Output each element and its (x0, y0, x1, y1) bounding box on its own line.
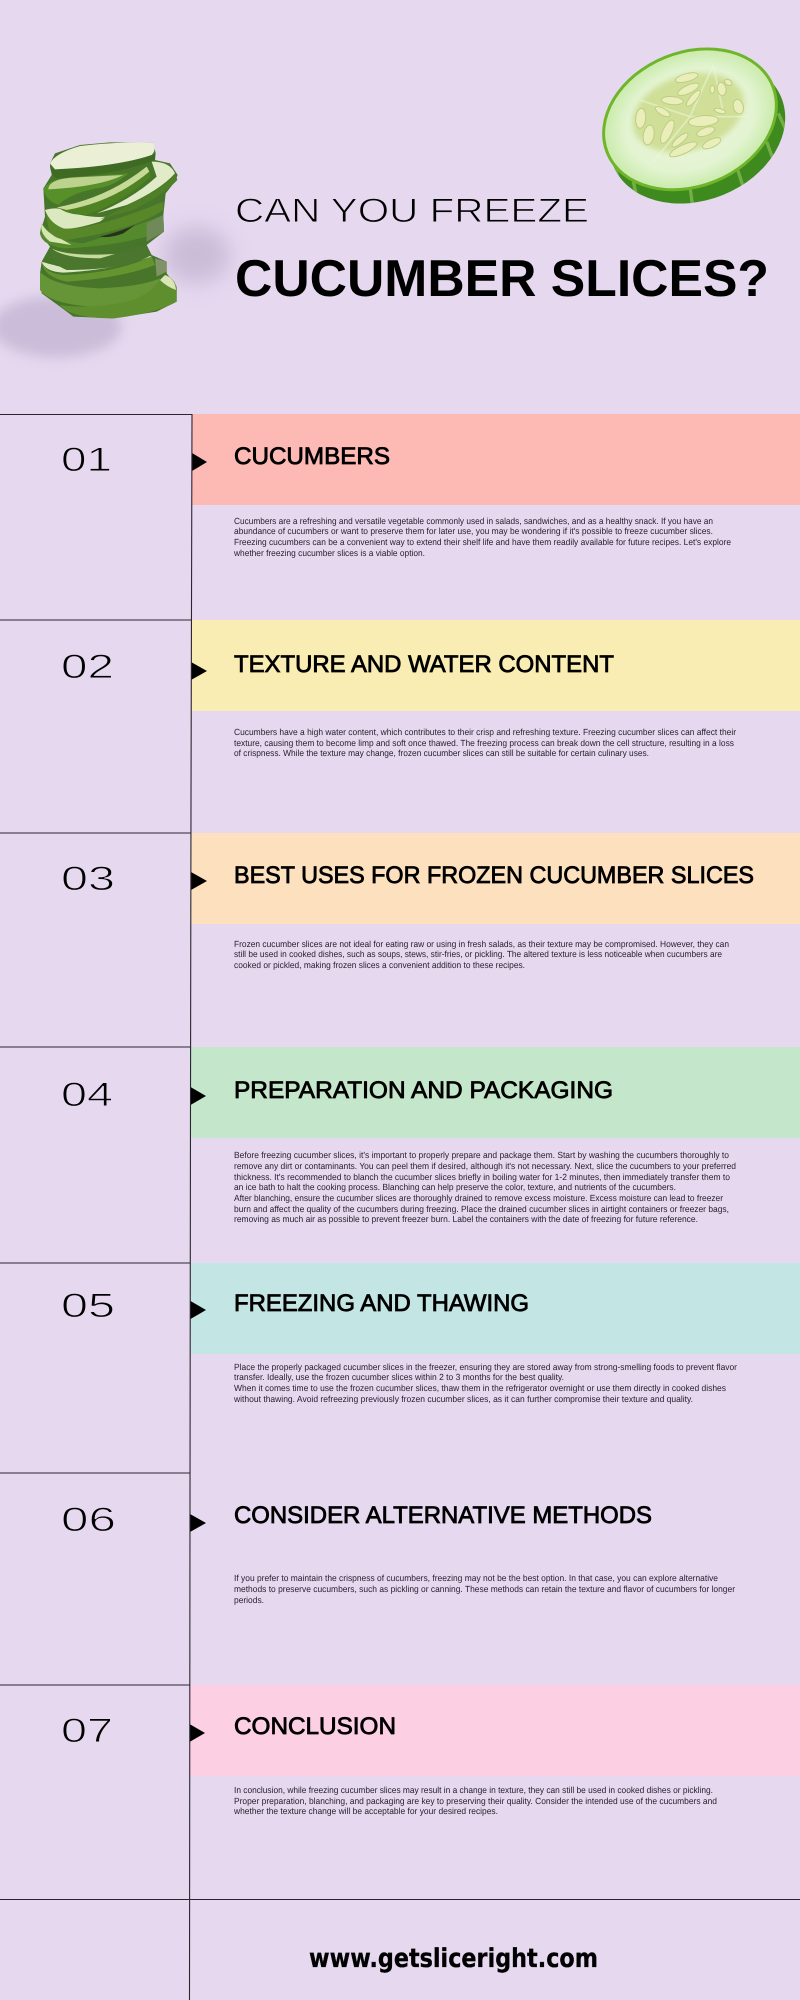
heading: FREEZING AND THAWING (234, 1290, 529, 1317)
header band (190, 1685, 800, 1776)
body text: without thawing. Avoid refreezing previously frozen cucumber slices, as it can further compromise their texture and quality. (233, 1394, 693, 1404)
body text: methods to preserve cucumbers, such as pickling or canning. These methods can retain the texture and flavor of cucumbers for longer (234, 1584, 735, 1594)
body text (234, 1150, 736, 1224)
image: stack of cucumber slices with shadow (0, 142, 230, 357)
panel: section 05 freezing and thawing (61, 1263, 800, 1404)
arrow (190, 1514, 206, 1532)
body text: After blanching, ensure the cucumber slices are thoroughly drained to remove excess moisture. Excess moisture can lead to freezer (234, 1193, 723, 1203)
body text: whether freezing cucumber slices is a viable option. (233, 548, 425, 558)
body text: Before freezing cucumber slices, it's important to properly prepare and package them. Start by washing the cucumbers thoroughly to (234, 1150, 729, 1160)
body text: an ice bath to halt the cooking process. Blanching can help preserve the color, texture, and nutrients of the cucumbers. (234, 1182, 676, 1192)
header band (192, 414, 800, 505)
image: single cucumber slice (602, 48, 786, 204)
footer website address: www.getsliceright.com (309, 1944, 598, 1974)
header band (191, 1047, 800, 1138)
number: 07 (61, 1712, 113, 1750)
panel: section 07 conclusion (61, 1685, 800, 1816)
panel: section 04 preparation and packaging (61, 1047, 800, 1224)
header band (191, 1263, 800, 1354)
body text: Freezing cucumbers can be a convenient way to extend their shelf life and have them readily available for future recipes. Let's explore (234, 537, 731, 547)
arrow (190, 1087, 206, 1105)
body text: texture, causing them to become limp and soft once thawed. The freezing process can break down the cell structure, resulting in a loss (234, 738, 735, 748)
body text: Cucumbers have a high water content, which contributes to their crisp and refreshing texture. Freezing cucumber slices can affect their (234, 727, 736, 737)
arrow (191, 872, 207, 890)
body text: If you prefer to maintain the crispness of cucumbers, freezing may not be the best option. In that case, you can explore alternative (234, 1573, 718, 1583)
panel: section 06 consider alternative methods (61, 1501, 735, 1605)
body text: Frozen cucumber slices are not ideal for eating raw or using in fresh salads, as their texture may be compromised. However, they can (234, 939, 729, 949)
heading: PREPARATION AND PACKAGING (234, 1077, 613, 1104)
body text: In conclusion, while freezing cucumber slices may result in a change in texture, they can still be used in cooked dishes or pickling. (234, 1785, 713, 1795)
heading: TEXTURE AND WATER CONTENT (234, 651, 614, 678)
heading: CUCUMBERS (234, 443, 390, 470)
header band (191, 620, 800, 711)
body text: cooked or pickled, making frozen slices a convenient addition to these recipes. (234, 960, 525, 970)
number: 02 (61, 648, 114, 686)
body text (233, 1785, 717, 1816)
panel: section 03 best uses (61, 833, 800, 970)
body text: of crispness. While the texture may change, frozen cucumber slices can still be suitable for certain culinary uses. (234, 748, 649, 758)
heading: BEST USES FOR FROZEN CUCUMBER SLICES (234, 862, 754, 889)
body text (234, 939, 729, 970)
body text: periods. (234, 1595, 264, 1605)
panel: section 02 texture and water content (61, 620, 800, 758)
number: 05 (61, 1287, 115, 1325)
body text: thickness. It's recommended to blanch the cucumber slices briefly in boiling water for 1-2 minutes, then immediately transfer them to (234, 1172, 730, 1182)
panel: section 01 cucumbers (61, 414, 800, 558)
header band (191, 833, 800, 924)
body text (234, 1573, 735, 1605)
heading: CONCLUSION (234, 1713, 396, 1740)
number: 03 (61, 860, 115, 898)
body text (233, 1362, 737, 1404)
heading: CONSIDER ALTERNATIVE METHODS (234, 1502, 652, 1529)
body text (233, 516, 731, 558)
title line 2: CUCUMBER SLICES? (235, 250, 769, 308)
arrow (192, 453, 207, 471)
body text: abundance of cucumbers or want to preserve them for later use, you may be wondering if it's possible to freeze cucumber slices. (234, 526, 713, 536)
title (235, 192, 769, 308)
body text (234, 727, 736, 758)
arrow (190, 1724, 205, 1742)
body text: removing as much air as possible to prevent freezer burn. Label the containers with the date of freezing for future reference. (234, 1214, 698, 1224)
title line 1: CAN YOU FREEZE (235, 192, 589, 230)
body text: whether the texture change will be acceptable for your desired recipes. (233, 1806, 498, 1816)
body text: Proper preparation, blanching, and packaging are key to preserving their quality. Consider the intended use of the cucumbers and (234, 1796, 717, 1806)
body text: Place the properly packaged cucumber slices in the freezer, ensuring they are stored away from strong-smelling foods to prevent flavor (234, 1362, 737, 1372)
body text: burn and affect the quality of the cucumbers during freezing. Place the drained cucumber slices in airtight containers or freezer bags, (234, 1204, 729, 1214)
number: 04 (61, 1076, 113, 1114)
arrow (191, 662, 207, 680)
number: 06 (61, 1501, 116, 1539)
body text: transfer. Ideally, use the frozen cucumber slices within 2 to 3 months for the best quality. (234, 1372, 564, 1382)
body text: Cucumbers are a refreshing and versatile vegetable commonly used in salads, sandwiches, and as a healthy snack. If you have an (234, 516, 713, 526)
arrow (190, 1301, 206, 1319)
number: 01 (61, 441, 112, 479)
body text: When it comes time to use the frozen cucumber slices, thaw them in the refrigerator overnight or use them directly in cooked dishes (234, 1383, 727, 1393)
body text: remove any dirt or contaminants. You can peel them if desired, although it's not necessary. Next, slice the cucumbers to your preferred (234, 1161, 736, 1171)
body text: still be used in cooked dishes, such as soups, stews, stir-fries, or pickling. The altered texture is less noticeable when cucumbers are (234, 949, 722, 959)
